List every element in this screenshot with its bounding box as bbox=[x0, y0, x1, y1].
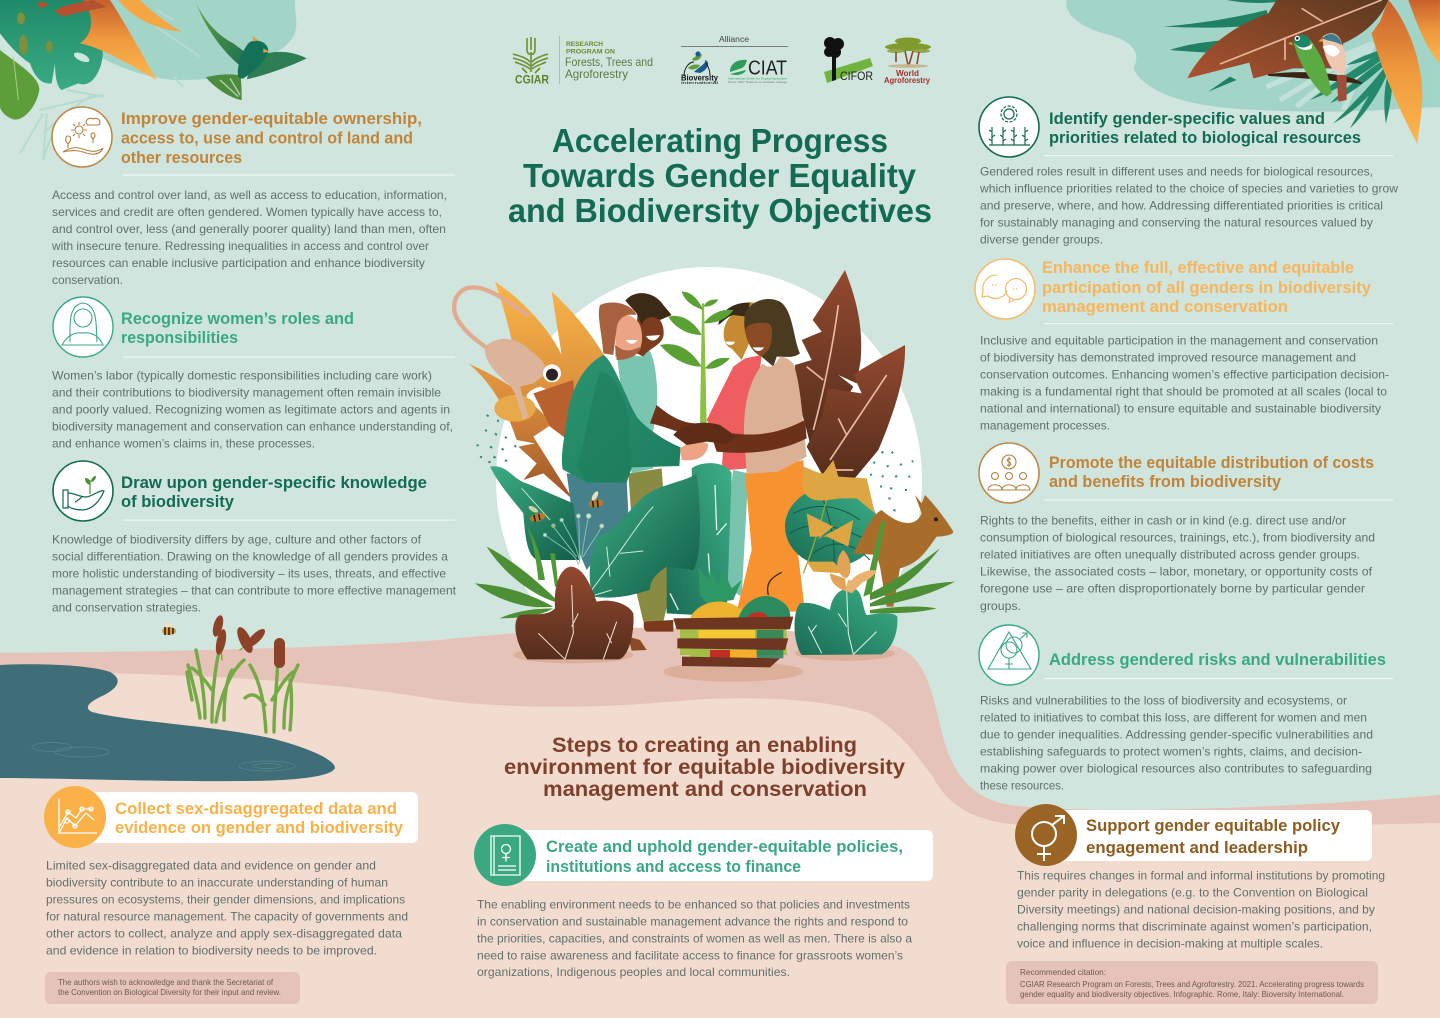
body text: more holistic understanding of biodiversity – its uses, threats, and effective bbox=[52, 566, 446, 580]
logo: CGIAR: Forests, Trees and bbox=[565, 55, 653, 69]
steps heading: Steps to creating an enabling bbox=[552, 734, 857, 757]
heading: Improve gender-equitable ownership, bbox=[121, 110, 422, 128]
body text: and enhance women’s claims in, these processes. bbox=[52, 436, 315, 450]
body text bbox=[52, 368, 453, 450]
left section 1: land bbox=[51, 107, 455, 287]
body text: making is a fundamental right that should be promoted at all scales (local to bbox=[980, 384, 1387, 398]
heading: Identify gender-specific values and bbox=[1049, 110, 1325, 128]
body text: gender parity in delegations (e.g. to the Convention on Biological bbox=[1017, 886, 1368, 900]
body text: national and international) to ensure equitable and sustainable biodiversity bbox=[980, 402, 1381, 416]
logo: CIFOR: CIFOR bbox=[840, 71, 873, 83]
body text: Rights to the benefits, either in cash or in kind (e.g. direct use and/or bbox=[980, 514, 1346, 528]
body text bbox=[52, 532, 457, 614]
body text: in conservation and sustainable management advance the rights and respond to bbox=[477, 914, 908, 928]
body text: for natural resource management. The capacity of governments and bbox=[46, 910, 408, 924]
body text: and evidence in relation to biodiversity needs to be improved. bbox=[46, 944, 377, 958]
icon: triangle and gender symbols bbox=[979, 625, 1039, 685]
body text: these resources. bbox=[980, 778, 1064, 792]
heading: and benefits from biodiversity bbox=[1049, 473, 1282, 491]
brown leaves right bbox=[795, 270, 905, 480]
left section 3: knowledge bbox=[52, 461, 457, 614]
heading: institutions and access to finance bbox=[546, 858, 801, 876]
heading: Draw upon gender-specific knowledge bbox=[121, 474, 427, 492]
icon: document with female symbol bbox=[474, 824, 536, 886]
heading bbox=[546, 838, 903, 876]
heading: Collect sex-disaggregated data and bbox=[115, 800, 397, 818]
body text: establishing safeguards to protect women’s rights, claims, and decision- bbox=[980, 744, 1362, 758]
heading: other resources bbox=[121, 149, 242, 167]
man 2 bbox=[617, 293, 672, 473]
logos bbox=[513, 34, 931, 86]
title: Accelerating Progress bbox=[552, 122, 888, 159]
trousers bbox=[628, 468, 670, 622]
body text: with insecure tenure. Redressing inequalities in access and control over bbox=[51, 239, 429, 253]
ground: blush band bbox=[0, 628, 1440, 1018]
logo: CGIAR: CGIAR bbox=[515, 72, 549, 86]
body text: for sustainably managing and conserving the natural resources valued by bbox=[980, 216, 1373, 230]
flower bbox=[543, 514, 604, 565]
hummingbird bbox=[195, 0, 307, 100]
sapling bbox=[660, 292, 733, 423]
top-right foliage bbox=[1066, 0, 1440, 144]
heading: management and conservation bbox=[1042, 298, 1288, 316]
title bbox=[508, 122, 932, 229]
logo: Alliance: CIAT bbox=[748, 58, 787, 80]
body text: management processes. bbox=[980, 418, 1110, 432]
body text: need to raise awareness and facilitate access to finance for grassroots women’s bbox=[477, 948, 903, 962]
ground: sand bbox=[0, 672, 1440, 1018]
body text: Gendered roles result in different uses and needs for biological resources, bbox=[980, 164, 1373, 178]
top-left foliage bbox=[0, 0, 296, 160]
body text: conservation. bbox=[52, 273, 123, 287]
icon: sun and plants bbox=[979, 97, 1039, 157]
heading: engagement and leadership bbox=[1086, 839, 1308, 857]
step: policies bbox=[474, 824, 933, 979]
heading bbox=[121, 474, 427, 511]
body text: management strategies – that can contribute to more effective management bbox=[52, 584, 457, 598]
body text: Likewise, the associated costs – labor, monetary, or opportunity costs of bbox=[980, 564, 1373, 578]
logo: World Agroforestry: World bbox=[896, 68, 919, 78]
citation box: gender equality and biodiversity objectives. Infographic. Rome, Italy: Bioversity International. bbox=[1020, 990, 1344, 999]
heading bbox=[1042, 259, 1372, 316]
body text: and their contributions to biodiversity management often remain invisible bbox=[52, 386, 441, 400]
icon: woman portrait bbox=[53, 297, 113, 357]
steps heading: management and conservation bbox=[543, 778, 867, 801]
man 1 bbox=[562, 302, 708, 570]
body text: which influence priorities related to the choice of species and varieties to grow bbox=[979, 182, 1398, 196]
icon: line chart bbox=[44, 786, 106, 848]
acknowledgement box: The authors wish to acknowledge and thank the Secretariat of bbox=[58, 978, 274, 987]
body text: foregone use – are often disproportionately borne by particular gender bbox=[980, 582, 1365, 596]
bee near reeds bbox=[162, 623, 176, 635]
spiky green fronds right bbox=[870, 548, 955, 613]
joined hands bbox=[673, 423, 737, 445]
right section 4: risks bbox=[979, 625, 1393, 792]
body text: Women’s labor (typically domestic responsibilities including care work) bbox=[52, 368, 432, 382]
citation box: CGIAR Research Program on Forests, Trees and Agroforestry. 2021. Accelerating progress towards bbox=[1020, 980, 1364, 989]
fruit basket bbox=[673, 567, 793, 667]
teal right plant with gold leaves bbox=[785, 460, 878, 573]
body text bbox=[1017, 868, 1385, 950]
heading bbox=[1049, 454, 1374, 491]
heading: responsibilities bbox=[121, 329, 238, 347]
logo: CGIAR bbox=[513, 36, 653, 86]
body text: challenging norms that discriminate against women’s participation, bbox=[1017, 920, 1372, 934]
ground shadows bbox=[513, 646, 895, 682]
woman 1 bbox=[707, 302, 762, 471]
heading: of biodiversity bbox=[121, 493, 235, 511]
icon: hand holding plant bbox=[53, 461, 113, 521]
dots left bbox=[477, 415, 516, 462]
body text: The enabling environment needs to be enhanced so that policies and investments bbox=[477, 898, 910, 912]
body text: related initiatives are often unequally distributed across gender groups. bbox=[980, 548, 1360, 562]
acknowledgement box: the Convention on Biological Diversity for their input and review. bbox=[58, 988, 281, 997]
cattail reeds bbox=[187, 614, 298, 732]
body text: voice and influence in decision-making at multiple scales. bbox=[1017, 936, 1323, 950]
brown front plant bbox=[515, 567, 634, 659]
body text: Access and control over land, as well as access to education, information, bbox=[52, 188, 447, 202]
logo: Alliance: Since 1967 Science to cultivate change bbox=[728, 80, 787, 84]
heading bbox=[121, 310, 354, 347]
left section 2: women's roles bbox=[52, 297, 455, 450]
logo: Alliance: Alliance bbox=[719, 34, 749, 44]
body text: the priorities, capacities, and constraints of women as well as men. There is also a bbox=[477, 932, 912, 946]
heading: Support gender equitable policy bbox=[1086, 817, 1341, 835]
body text: biodiversity management and conservation can enhance understanding of, bbox=[52, 420, 453, 434]
body text: Inclusive and equitable participation in the management and conservation bbox=[980, 334, 1378, 348]
woman 2 bbox=[744, 299, 807, 474]
bees bbox=[528, 490, 604, 523]
citation box: Recommended citation: bbox=[1020, 968, 1106, 977]
butterfly bbox=[830, 550, 877, 593]
heading bbox=[1086, 817, 1341, 857]
logo: World Agroforestry bbox=[884, 38, 931, 85]
body text bbox=[980, 514, 1375, 613]
white sun circle bbox=[496, 267, 922, 693]
logo: Alliance: International bbox=[681, 81, 718, 85]
body text: making power over biological resources also contributes to safeguarding bbox=[980, 762, 1372, 776]
title: Towards Gender Equality bbox=[523, 157, 917, 194]
body text: other actors to collect, analyze and apply sex-disaggregated data bbox=[46, 926, 402, 940]
body text: This requires changes in formal and informal institutions by promoting bbox=[1017, 868, 1385, 882]
body text: and preserve, where, and how. Addressing differentiated priorities is critical bbox=[980, 198, 1383, 212]
icon: people and coin bbox=[979, 443, 1039, 503]
logo: Alliance: International Center for Tropical Agriculture bbox=[728, 76, 787, 80]
steps heading: environment for equitable biodiversity bbox=[504, 756, 905, 779]
body text: diverse gender groups. bbox=[980, 232, 1103, 246]
orange leaf and monkey bbox=[454, 282, 607, 500]
spiky green fronds left bbox=[475, 547, 560, 618]
body text: and control over, less (and generally poorer quality) land than men, often bbox=[52, 222, 446, 236]
body text: Limited sex-disaggregated data and evidence on gender and bbox=[46, 858, 376, 872]
body text: services and credit are often gendered. Women typically have access to, bbox=[52, 205, 442, 219]
heading: priorities related to biological resources bbox=[1049, 129, 1361, 147]
citation box bbox=[1006, 961, 1378, 1004]
step: collect data bbox=[44, 786, 418, 958]
deer bbox=[853, 495, 953, 607]
body text: groups. bbox=[980, 599, 1021, 613]
logo: CIFOR bbox=[824, 37, 873, 83]
body text bbox=[477, 898, 912, 979]
right section 1: values bbox=[979, 97, 1398, 246]
heading: evidence on gender and biodiversity bbox=[115, 819, 404, 837]
body text: and conservation strategies. bbox=[52, 600, 201, 614]
teal left leaf bbox=[490, 466, 580, 587]
body text: due to gender inequalities. Addressing gender-specific vulnerabilities and bbox=[980, 728, 1373, 742]
steps heading bbox=[504, 734, 905, 801]
icon: speech bubbles bbox=[975, 259, 1035, 319]
logo: Alliance: Bioversity bbox=[681, 74, 719, 82]
body text: Diversity meetings) and national decision-making positions, and by bbox=[1017, 902, 1375, 916]
body text: related to initiatives to combat this loss, are different for women and men bbox=[980, 710, 1367, 724]
heading bbox=[1049, 110, 1361, 147]
icon: gender symbol bbox=[1015, 804, 1077, 866]
heading bbox=[121, 110, 422, 167]
logo: CGIAR: RESEARCH bbox=[566, 41, 603, 48]
logo: CGIAR: Agroforestry bbox=[565, 67, 628, 81]
body text: of biodiversity has demonstrated improved resource management and bbox=[980, 350, 1356, 364]
right section 3: costs and benefits bbox=[979, 443, 1393, 613]
body text bbox=[980, 334, 1389, 432]
body text: social differentiation. Drawing on the knowledge of all genders provides a bbox=[52, 550, 448, 564]
body text: conservation outcomes. Enhancing women’s effective participation decision- bbox=[980, 368, 1389, 382]
right section 2: participation bbox=[975, 259, 1393, 432]
icon: land and sun bbox=[52, 107, 112, 167]
heading: access to, use and control of land and bbox=[121, 130, 413, 148]
logo: Alliance bbox=[681, 34, 788, 85]
teal front plant bbox=[795, 588, 897, 655]
heading: Create and uphold gender-equitable policies, bbox=[546, 838, 903, 856]
logo: World Agroforestry: Agroforestry bbox=[884, 75, 930, 85]
heading: Enhance the full, effective and equitable bbox=[1042, 259, 1354, 277]
dots right bbox=[870, 451, 913, 511]
front green plant bbox=[590, 473, 700, 598]
heading bbox=[115, 800, 404, 837]
body text bbox=[979, 164, 1398, 246]
body text bbox=[980, 694, 1373, 792]
pond bbox=[0, 664, 335, 781]
body text: pressures on ecosystems, their gender dimensions, and implications bbox=[46, 892, 405, 906]
body text: and poorly valued. Recognizing women as legitimate actors and agents in bbox=[52, 402, 450, 416]
body text: biodiversity contribute to an inaccurate understanding of human bbox=[46, 876, 388, 890]
body text: Knowledge of biodiversity differs by age, culture and other factors of bbox=[52, 532, 422, 546]
body text: Risks and vulnerabilities to the loss of biodiversity and ecosystems, or bbox=[980, 694, 1347, 708]
heading: participation of all genders in biodiversity bbox=[1042, 279, 1372, 297]
body text: organizations, Indigenous peoples and local communities. bbox=[477, 965, 790, 979]
body text: consumption of biological resources, trainings, etc.), from biodiversity and bbox=[980, 530, 1375, 544]
central illustration: people and plants bbox=[454, 270, 955, 682]
body text bbox=[46, 858, 408, 958]
title: and Biodiversity Objectives bbox=[508, 192, 932, 229]
heading: Promote the equitable distribution of costs bbox=[1049, 454, 1374, 472]
acknowledgement box bbox=[45, 972, 300, 1004]
body text bbox=[51, 188, 447, 287]
body text: resources can enable inclusive participation and enhance biodiversity bbox=[52, 256, 425, 270]
heading: Address gendered risks and vulnerabilities bbox=[1049, 651, 1386, 669]
logo: CGIAR: PROGRAM ON bbox=[566, 48, 615, 56]
heading: Recognize women’s roles and bbox=[121, 310, 354, 328]
back teal plants bbox=[667, 463, 732, 617]
step: policy engagement bbox=[1015, 804, 1385, 950]
arms bbox=[650, 405, 807, 453]
